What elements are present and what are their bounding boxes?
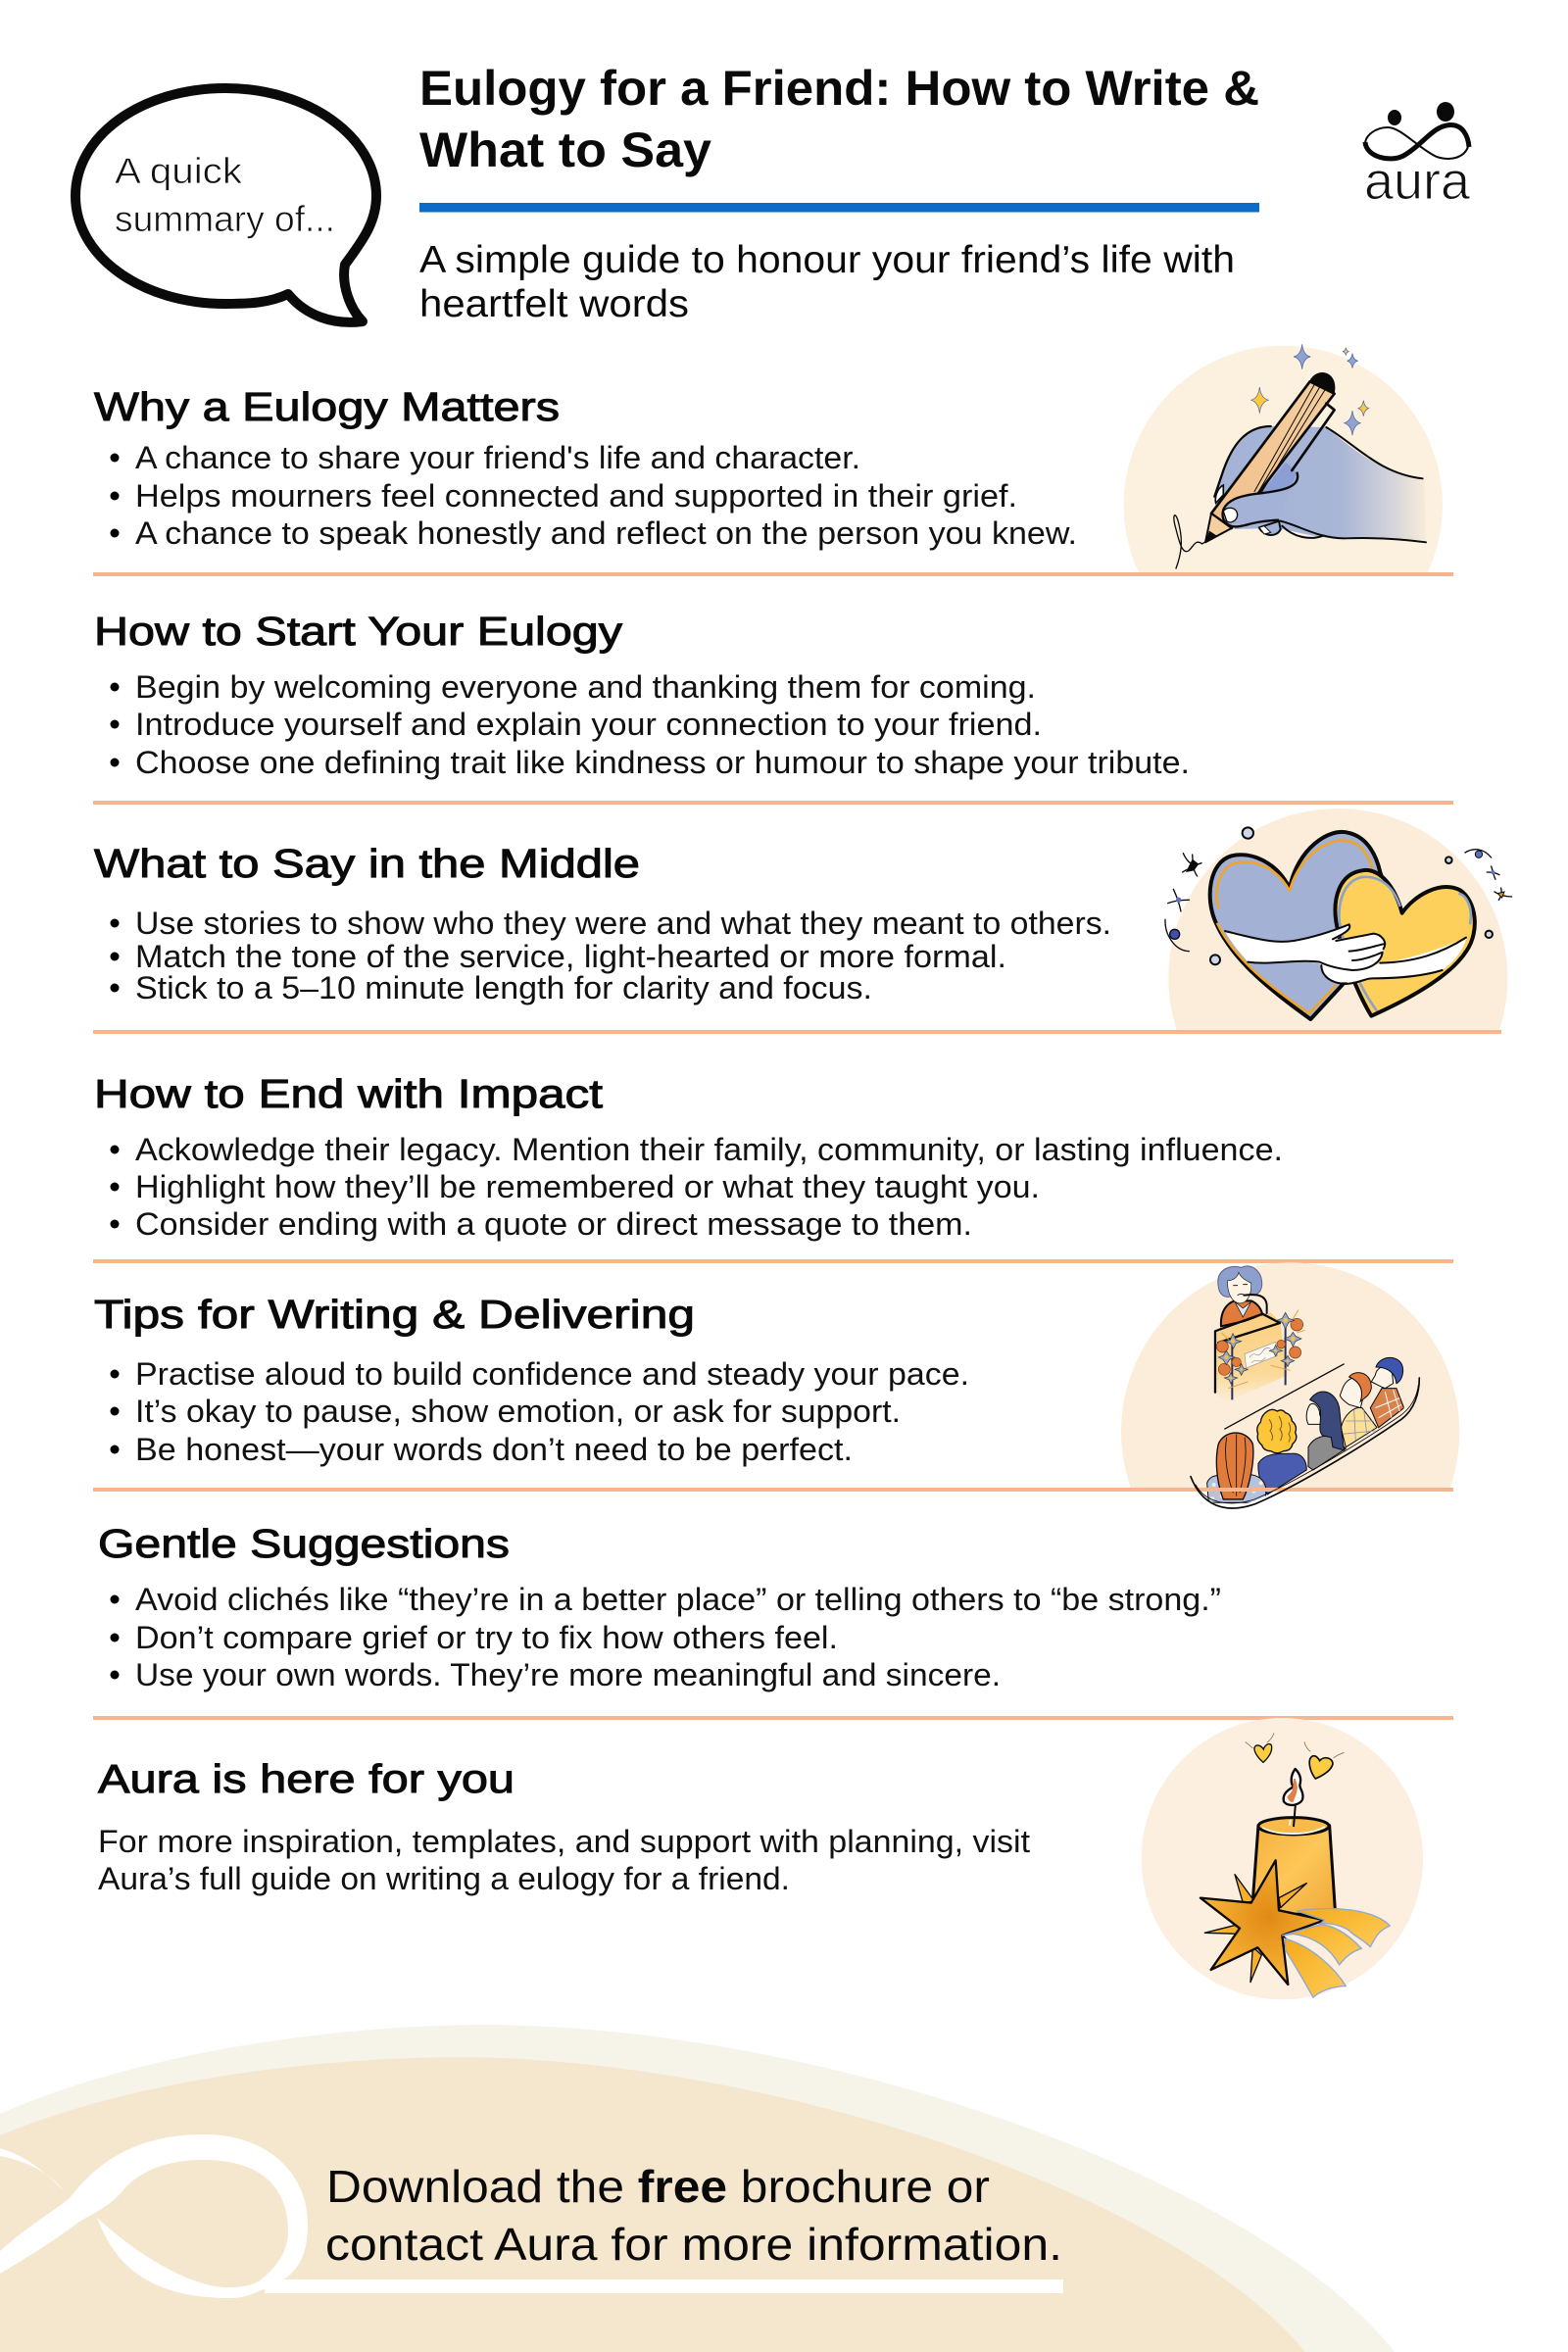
decorations	[1210, 827, 1493, 964]
illustration: candle and shooting star	[1142, 1718, 1423, 1999]
section: why a eulogy matters	[94, 384, 1077, 551]
bullet list: Avoid clichés like “they’re in a better place” or telling others to “be strong.”	[135, 1582, 1221, 1617]
subtitle: A simple guide to honour your friend’s life with	[419, 239, 1235, 281]
yellow heart	[1336, 870, 1475, 1016]
bullet list: Ackowledge their legacy. Mention their family, community, or lasting influence.	[135, 1132, 1283, 1167]
candle	[1251, 1803, 1336, 1914]
logo: aura: aura	[1364, 152, 1471, 211]
title: What to Say	[419, 122, 711, 177]
bullet list: A chance to speak honestly and reflect on the person you knew.	[135, 515, 1077, 551]
heading: What to Say in the Middle	[94, 841, 640, 886]
speech bubble: A quick summary of...	[75, 88, 376, 322]
body text	[98, 1824, 1030, 1896]
bullet list	[110, 1132, 1283, 1242]
bullet list: Use your own words. They’re more meaningful and sincere.	[135, 1657, 1001, 1692]
bubble text	[115, 151, 335, 239]
arms	[1225, 924, 1467, 982]
subtitle	[419, 239, 1235, 325]
bubble text: A quick	[115, 151, 243, 191]
bullet list: Match the tone of the service, light-hearted or more formal.	[135, 939, 1006, 974]
bullet list: Stick to a 5–10 minute length for clarity and focus.	[135, 970, 872, 1005]
heading: Why a Eulogy Matters	[94, 384, 560, 429]
ribbon tails	[1282, 1909, 1390, 1997]
bullet list: Helps mourners feel connected and supported in their grief.	[135, 478, 1017, 514]
heading: Gentle Suggestions	[98, 1521, 510, 1566]
illustration: speaker at lectern and audience	[1121, 1262, 1460, 1503]
person 4	[1340, 1373, 1377, 1447]
section: how to start your eulogy	[94, 609, 1190, 780]
logo: aura	[1364, 102, 1471, 211]
hearts	[1246, 1733, 1345, 1779]
body text: Aura’s full guide on writing a eulogy for a friend.	[98, 1861, 790, 1896]
heading: Tips for Writing & Delivering	[94, 1292, 695, 1337]
section: how to end with impact	[94, 1071, 1283, 1242]
section: gentle suggestions	[98, 1521, 1221, 1692]
divider 3	[93, 1030, 1501, 1034]
illustration: embracing hearts	[1164, 808, 1513, 1030]
bullet list	[110, 906, 1111, 1005]
person 2	[1257, 1409, 1306, 1494]
blue title rule	[419, 203, 1259, 212]
footer call to action: contact Aura for more information.	[325, 2219, 1062, 2270]
bullet list	[110, 669, 1190, 780]
divider 1	[93, 572, 1453, 576]
bullet list: Highlight how they’ll be remembered or what they taught you.	[135, 1169, 1040, 1204]
heading: How to Start Your Eulogy	[94, 609, 623, 654]
bullet list: Introduce yourself and explain your connection to your friend.	[135, 707, 1042, 742]
footer background	[0, 2025, 1395, 2352]
person 5	[1370, 1357, 1404, 1428]
bullet list: Choose one defining trait like kindness or humour to shape your tribute.	[135, 745, 1190, 780]
bullet list: Consider ending with a quote or direct message to them.	[135, 1206, 972, 1242]
person 1	[1207, 1433, 1266, 1502]
divider 6	[93, 1716, 1453, 1720]
footer infinity ribbon	[0, 2134, 1063, 2298]
lectern	[1215, 1310, 1305, 1401]
footer underline bar	[265, 2279, 1063, 2293]
footer call to action	[325, 2161, 1062, 2270]
bullet list	[110, 440, 1077, 551]
section: tips for writing and delivering	[94, 1292, 969, 1467]
divider 2	[93, 801, 1453, 805]
bubble text: summary of...	[115, 199, 335, 239]
bullet list: A chance to share your friend's life and character.	[135, 440, 860, 475]
divider 4	[93, 1259, 1453, 1263]
bullet list: Use stories to show who they were and what they meant to others.	[135, 906, 1111, 941]
speaker	[1218, 1266, 1273, 1326]
bullet list: Begin by welcoming everyone and thanking them for coming.	[135, 669, 1036, 705]
footer call to action: Download the free brochure or	[326, 2161, 990, 2212]
body text: For more inspiration, templates, and support with planning, visit	[98, 1824, 1030, 1859]
section: what to say in the middle	[94, 841, 1111, 1005]
bullet list: Don’t compare grief or try to fix how others feel.	[135, 1620, 838, 1655]
flame	[1284, 1769, 1303, 1805]
heading: Aura is here for you	[98, 1756, 514, 1801]
bullet list: Be honest—your words don’t need to be perfect.	[135, 1432, 853, 1467]
audience bench	[1191, 1378, 1419, 1508]
section: aura is here for you	[98, 1756, 1030, 1896]
heading: How to End with Impact	[94, 1071, 604, 1116]
bullet list	[110, 1356, 969, 1467]
blue heart	[1210, 832, 1398, 1019]
title: Eulogy for a Friend: How to Write &	[419, 61, 1259, 116]
person 3	[1306, 1392, 1346, 1470]
illustration: hand writing with pencil	[1123, 344, 1443, 572]
divider 5	[93, 1488, 1453, 1492]
star	[1200, 1860, 1325, 1984]
audience	[1207, 1357, 1404, 1502]
title	[419, 61, 1259, 177]
subtitle: heartfelt words	[419, 283, 689, 325]
bullet list: Practise aloud to build confidence and steady your pace.	[135, 1356, 969, 1392]
bullet list: It’s okay to pause, show emotion, or ask for support.	[135, 1394, 901, 1429]
bullet list	[110, 1582, 1221, 1692]
